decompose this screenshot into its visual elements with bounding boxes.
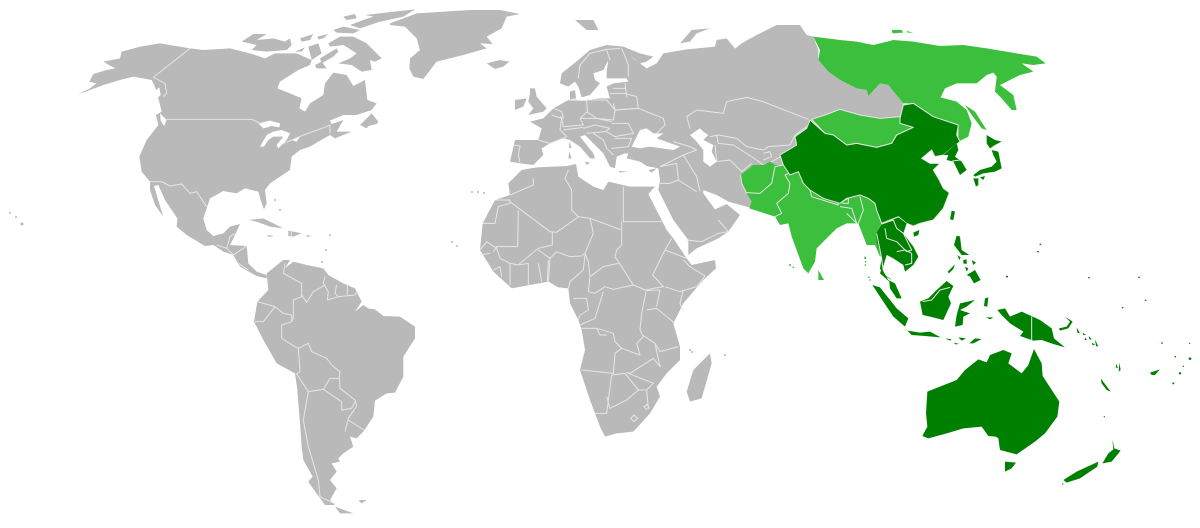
Taiwan (950, 211, 955, 220)
Indonesia (872, 285, 993, 344)
Greenland and Iceland (390, 10, 520, 79)
North America (77, 9, 415, 278)
Borneo (920, 281, 953, 320)
dark green: maritime Southeast Asia and Oceania (865, 236, 1191, 485)
New Zealand (1063, 439, 1121, 483)
China (780, 103, 960, 226)
Eurasia (510, 20, 903, 255)
small grey islands (9, 191, 726, 356)
Africa (480, 164, 716, 437)
Pacific islands (865, 243, 1191, 485)
grey landmasses (9, 9, 903, 513)
New Guinea (997, 308, 1065, 347)
Far East Russia (813, 30, 1046, 142)
Malay Peninsula (880, 268, 902, 298)
Japan (973, 135, 1002, 187)
South Asia (741, 162, 884, 280)
South America (254, 260, 415, 513)
Korea (943, 143, 967, 175)
light green: eastern Russia, Mongolia and South Asia (741, 30, 1046, 280)
Hainan (913, 230, 919, 237)
Mongolia (812, 109, 913, 147)
dark green: East and Southeast Asia mainland (780, 103, 1002, 280)
Tasmania (1005, 462, 1016, 472)
Philippines (948, 236, 981, 283)
Australia (922, 349, 1059, 454)
Indochina (876, 217, 918, 280)
